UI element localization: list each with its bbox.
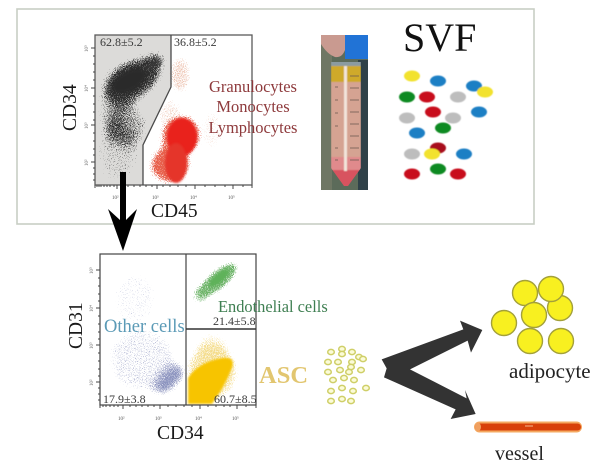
label: Granulocytes Monocytes Lymphocytes	[209, 77, 297, 137]
tick labels: 10²	[118, 416, 125, 422]
title: SVF: SVF	[403, 15, 476, 60]
quadrant percentages	[103, 314, 257, 406]
photo: centrifuge tube	[321, 35, 368, 190]
plot frame and quadrant lines	[100, 254, 256, 405]
icon: adipocyte cluster	[492, 276, 574, 354]
tick labels: 10²	[84, 159, 90, 166]
black cell population	[98, 52, 166, 178]
tick labels: 10⁴	[195, 416, 202, 422]
label: Granulocytes Monocytes Lymphocytes: Lymphocytes	[209, 118, 297, 137]
tick labels: 10²	[112, 195, 119, 201]
tick labels: 10³	[84, 122, 90, 129]
tick labels	[84, 45, 235, 201]
icon: SVF mixed cells	[399, 70, 493, 180]
tube graduation marks	[335, 76, 359, 160]
quadrant percentages: 17.9±3.8	[103, 392, 146, 406]
label: Granulocytes Monocytes Lymphocytes: Granulocytes	[209, 77, 297, 96]
gate percentages: 62.8±5.2	[100, 35, 143, 49]
tick labels: 10⁵	[228, 195, 235, 201]
axis label: CD45: CD45	[151, 201, 198, 222]
quadrant percentages: 21.4±5.8	[213, 314, 256, 328]
gated grey region	[95, 35, 171, 185]
plot frame and gate line	[95, 35, 252, 185]
tube body	[331, 62, 361, 186]
arrow: black down arrow from gate to second plot	[108, 172, 137, 251]
axis label: CD31: CD31	[66, 302, 87, 349]
tick labels: 10⁵	[89, 267, 95, 274]
label: Endothelial cells: Endothelial cells	[218, 297, 328, 316]
label: ASC: ASC	[259, 362, 308, 389]
label: Other cells: Other cells	[104, 317, 185, 337]
label: adipocyte: adipocyte	[509, 359, 591, 383]
tick labels: 10⁵	[84, 45, 90, 52]
arrow: forked differentiation arrows	[382, 321, 482, 419]
tick labels: 10⁵	[232, 416, 239, 422]
thumb	[321, 35, 345, 57]
gate percentages: 36.8±5.2	[174, 35, 217, 49]
label: vessel: vessel	[495, 443, 544, 465]
chart: CD34 vs CD45 scatter plot	[84, 35, 252, 201]
icon: vessel tube	[474, 422, 582, 432]
gate percentages	[100, 35, 217, 49]
tick labels: 10³	[152, 195, 159, 201]
tick labels: 10⁴	[190, 195, 197, 201]
axis label: CD34: CD34	[60, 84, 81, 131]
quadrant percentages: 60.7±8.5	[214, 392, 257, 406]
icon: ASC small cells	[325, 346, 369, 404]
panel: SVF isolation frame	[17, 9, 534, 224]
tick labels: 10²	[89, 379, 95, 386]
red cell population	[148, 55, 226, 185]
axis ticks	[91, 48, 252, 189]
tick labels: 10⁴	[84, 85, 90, 92]
tick labels: 10⁴	[89, 305, 95, 312]
tick labels: 10³	[89, 342, 95, 349]
scatter populations	[110, 262, 238, 404]
axis ticks	[96, 270, 256, 409]
tube cap	[345, 35, 368, 59]
label: Granulocytes Monocytes Lymphocytes: Monocytes	[216, 97, 290, 116]
tick labels	[89, 267, 239, 422]
axis label: CD34: CD34	[157, 423, 204, 444]
chart: CD31 vs CD34 scatter plot	[89, 254, 257, 422]
tick labels: 10³	[155, 416, 162, 422]
